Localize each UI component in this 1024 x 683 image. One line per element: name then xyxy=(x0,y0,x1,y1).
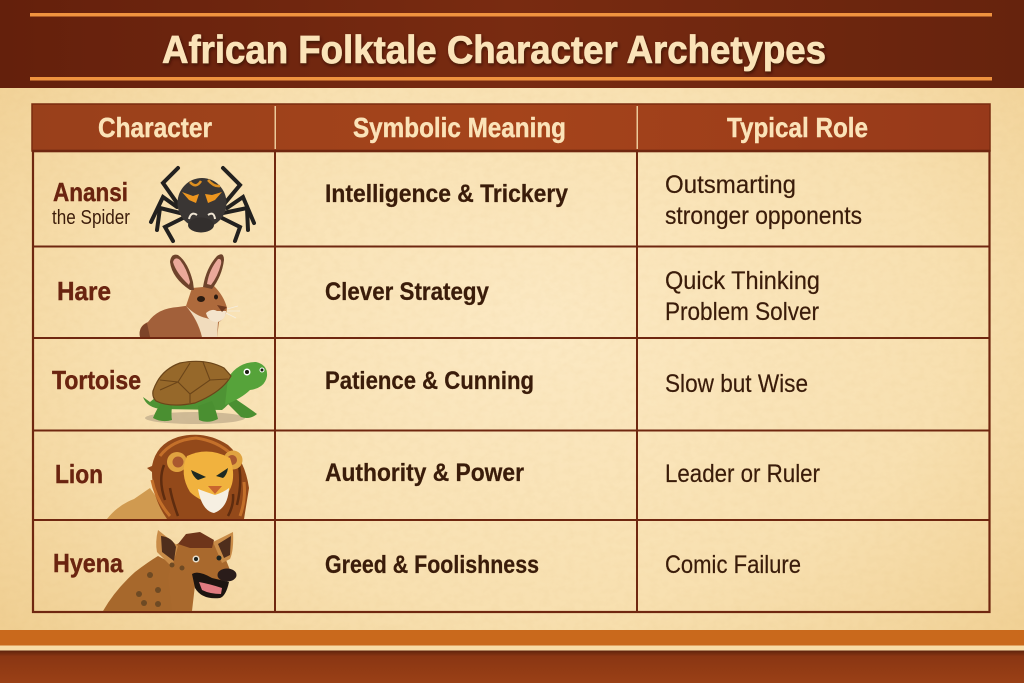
column: symbolic meaning: Patience & Cunning xyxy=(325,367,534,395)
column: symbolic meaning: Clever Strategy xyxy=(325,278,489,306)
icon: tortoise xyxy=(143,361,267,424)
column: typical role: Outsmarting xyxy=(665,171,796,199)
column: typical role: Comic Failure xyxy=(665,551,801,579)
icon: spider xyxy=(151,168,254,241)
column: symbolic meaning xyxy=(325,180,568,579)
icon: lion xyxy=(107,435,249,519)
table header row: Character xyxy=(98,112,212,143)
icon: hyena xyxy=(103,530,236,611)
column: typical role: Leader or Ruler xyxy=(665,460,820,488)
title: African Folktale Character Archetypes xyxy=(162,29,826,72)
row: Tortoise: Tortoise xyxy=(52,365,141,395)
column: typical role xyxy=(665,171,862,579)
table grid xyxy=(33,151,990,612)
table header row: Typical Role xyxy=(727,112,868,143)
column: typical role: Slow but Wise xyxy=(665,370,808,398)
row: Hyena xyxy=(53,530,236,611)
row: Hyena: Hyena xyxy=(53,548,123,578)
row: Lion xyxy=(55,435,249,519)
row: Hare: Hare xyxy=(57,276,111,306)
row: Hare xyxy=(57,254,240,337)
row: Lion: Lion xyxy=(55,459,103,489)
row: Anansi xyxy=(52,168,254,241)
table header row: Symbolic Meaning xyxy=(353,112,566,143)
row: Anansi: the Spider xyxy=(52,207,130,229)
row: Tortoise xyxy=(52,361,267,424)
row: Anansi: Anansi xyxy=(53,177,128,207)
table xyxy=(32,104,990,612)
column: typical role: stronger opponents xyxy=(665,202,862,230)
footer band xyxy=(0,630,1024,683)
column: symbolic meaning: Greed & Foolishness xyxy=(325,551,539,579)
column: symbolic meaning: Intelligence & Trickery xyxy=(325,180,568,208)
column: symbolic meaning: Authority & Power xyxy=(325,459,524,487)
column: typical role: Problem Solver xyxy=(665,298,819,326)
table header row xyxy=(32,104,990,151)
icon: hare xyxy=(140,254,240,337)
title banner xyxy=(0,0,1024,88)
column: typical role: Quick Thinking xyxy=(665,267,820,295)
